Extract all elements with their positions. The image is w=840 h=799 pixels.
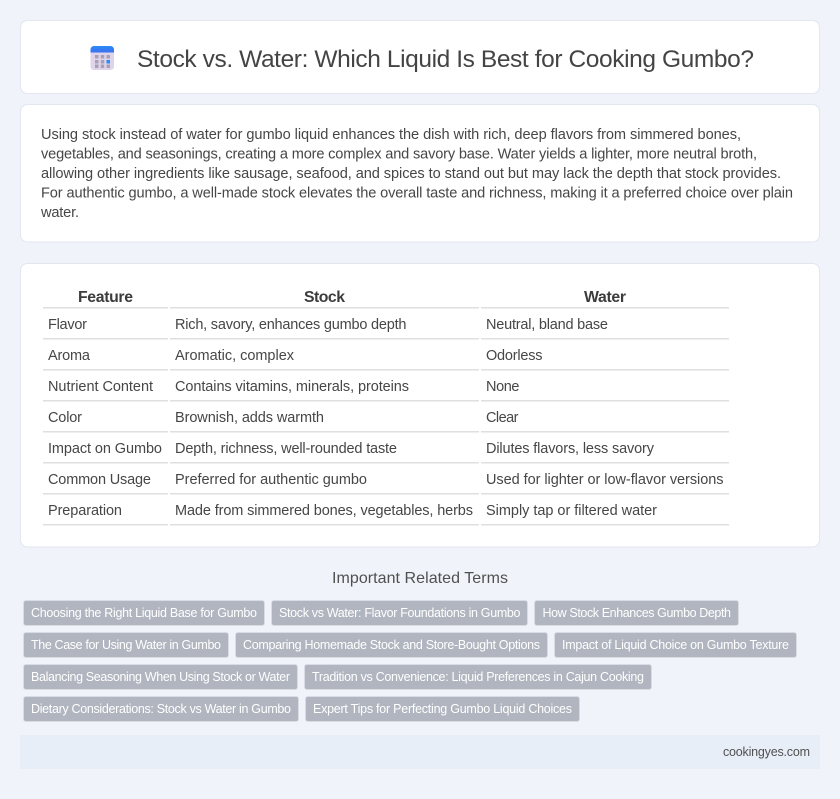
row: Common Usage: Preferred for authentic gumbo: [175, 472, 367, 488]
header panel: [20, 20, 820, 94]
row: Color: Brownish, adds warmth: [175, 410, 324, 426]
panel: summary paragraph: [20, 104, 820, 242]
tag: Choosing the Right Liquid Base for Gumbo: [31, 606, 257, 620]
row: Preparation: Made from simmered bones, vegetables, herbs: [175, 503, 473, 519]
icon: calendar: [90, 46, 114, 70]
footer: source: cookingyes.com: [723, 745, 810, 759]
heading: related terms: Important Related Terms: [332, 570, 508, 587]
tag: [272, 600, 528, 626]
row: Color: Color: [48, 410, 82, 426]
row: Aroma: Aroma: [48, 348, 91, 364]
row: Preparation: Simply tap or filtered water: [486, 503, 657, 519]
panel: comparison table: [20, 264, 820, 547]
tag: How Stock Enhances Gumbo Depth: [542, 606, 731, 620]
row: Impact on Gumbo: Dilutes flavors, less savory: [486, 441, 655, 457]
tag: [24, 664, 298, 690]
tag: Impact of Liquid Choice on Gumbo Texture: [562, 638, 789, 652]
text block: summary: Using stock instead of water for gumbo liquid enhances the dish with rich, deep flavors from simmered bones,: [41, 127, 741, 143]
related term tags: [24, 600, 796, 722]
text block: summary: For authentic gumbo, a well-made stock elevates the overall taste and richness, making it a preferred choice over plain: [41, 186, 793, 202]
row: Flavor: Rich, savory, enhances gumbo depth: [175, 317, 406, 333]
tag: Balancing Seasoning When Using Stock or Water: [31, 670, 290, 684]
row: Common Usage: Common Usage: [48, 472, 151, 488]
tag: [304, 664, 652, 690]
tag: [24, 696, 298, 722]
row: Impact on Gumbo: Impact on Gumbo: [48, 441, 162, 457]
tag: [306, 696, 580, 722]
tag: Comparing Homemade Stock and Store-Bought Options: [243, 638, 540, 652]
table header: Water: [584, 289, 626, 306]
row: Aroma: Odorless: [486, 348, 542, 364]
title: Stock vs. Water: Which Liquid Is Best for Cooking Gumbo?: [137, 46, 754, 73]
row: Nutrient Content: Nutrient Content: [48, 379, 153, 395]
text block: summary: allowing other ingredients like sausage, seafood, and spices to stand out but may lack the depth that stock provides.: [41, 166, 781, 182]
row: Impact on Gumbo: Depth, richness, well-rounded taste: [175, 441, 397, 457]
tag: [554, 632, 796, 658]
table header: [78, 289, 626, 306]
row: Nutrient Content: None: [486, 379, 520, 395]
text block: summary: water.: [40, 205, 79, 221]
row: Impact on Gumbo: [48, 441, 655, 457]
row: Nutrient Content: Contains vitamins, minerals, proteins: [175, 379, 409, 395]
text block: summary: vegetables, and seasonings, creating a more complex and savory base. Water yields a lighter, more neutral broth,: [41, 146, 757, 162]
table header: Stock: [304, 289, 345, 306]
tag: Dietary Considerations: Stock vs Water in Gumbo: [31, 702, 291, 716]
row: Nutrient Content: [48, 379, 520, 395]
tag: [24, 600, 264, 626]
row: Preparation: [48, 503, 657, 519]
tag: [236, 632, 548, 658]
tag: Expert Tips for Perfecting Gumbo Liquid Choices: [313, 702, 572, 716]
row: Aroma: [48, 348, 542, 364]
row: Color: [48, 410, 519, 426]
table header: Feature: [78, 289, 133, 306]
row: Common Usage: Used for lighter or low-flavor versions: [486, 472, 724, 488]
row: Common Usage: [48, 472, 724, 488]
row: Preparation: Preparation: [48, 503, 122, 519]
text block: summary: [40, 127, 793, 221]
footer: [20, 735, 820, 769]
tag: [534, 600, 738, 626]
tag: Stock vs Water: Flavor Foundations in Gumbo: [279, 606, 521, 620]
row: Color: Clear: [486, 410, 519, 426]
row: Flavor: Neutral, bland base: [486, 317, 608, 333]
tag: The Case for Using Water in Gumbo: [31, 638, 221, 652]
row: Flavor: Flavor: [48, 317, 87, 333]
row: Aroma: Aromatic, complex: [175, 348, 295, 364]
tag: [24, 632, 228, 658]
tag: Tradition vs Convenience: Liquid Preferences in Cajun Cooking: [312, 670, 644, 684]
row: Flavor: [48, 317, 608, 333]
